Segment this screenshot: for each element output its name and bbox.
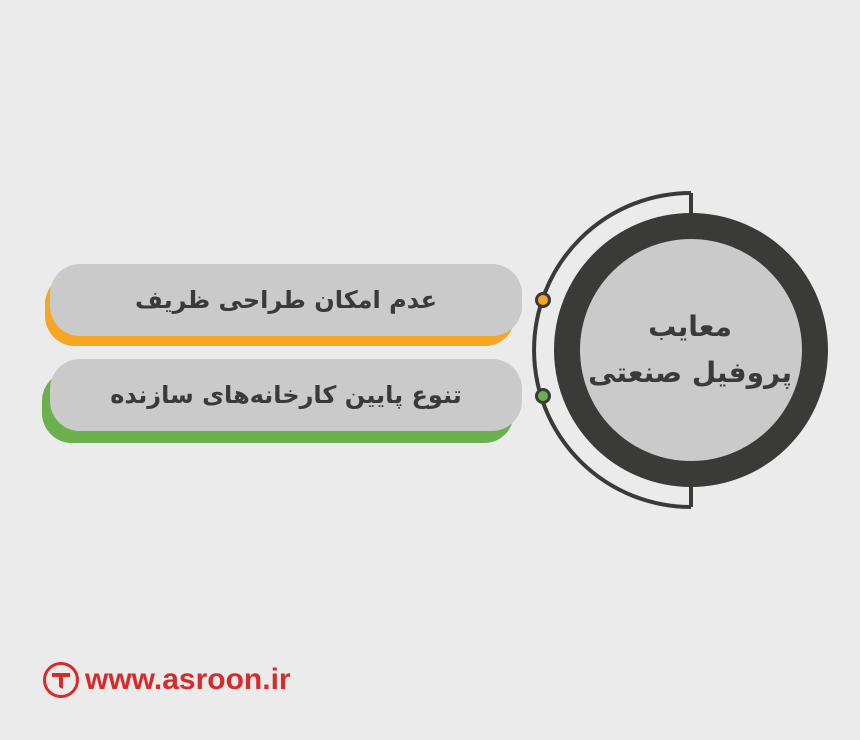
item 1: orange pill (45, 264, 522, 346)
item 2: green pill (42, 359, 522, 443)
logo and url: www.asroon.ir (85, 663, 291, 696)
circle title: معایب (648, 310, 732, 343)
text 1: عدم امکان طراحی ظریف (135, 286, 437, 314)
circle title: پروفیل صنعتی (588, 356, 792, 389)
icon: logo (43, 662, 79, 698)
circle title (588, 310, 792, 389)
text 2: تنوع پایین کارخانه‌های سازنده (110, 381, 462, 409)
